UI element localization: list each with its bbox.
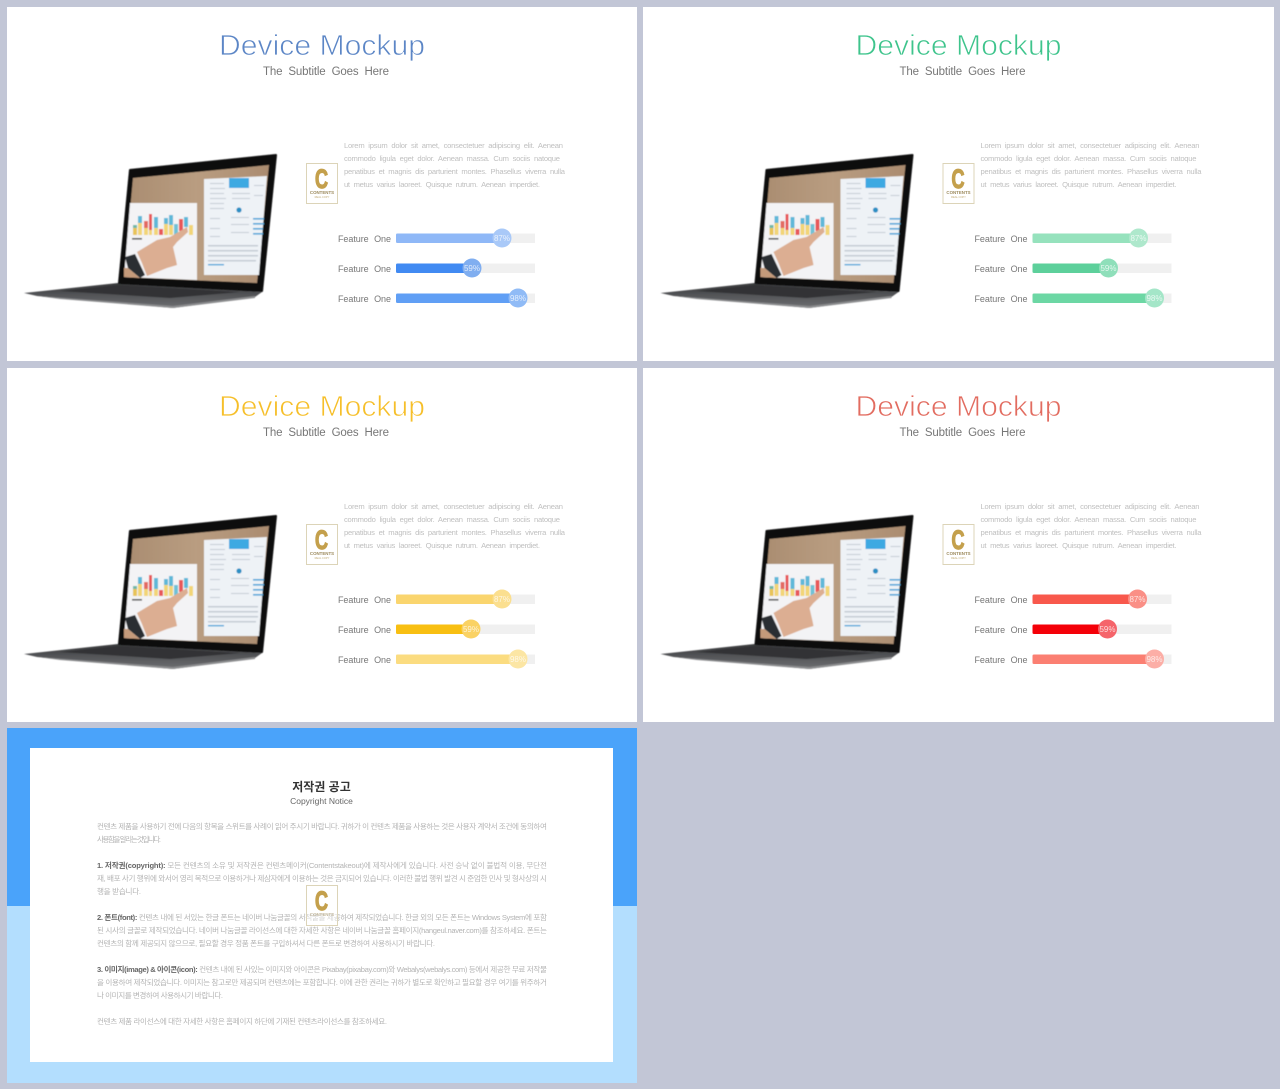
text block: penatibus et magnis dis parturient montes. Phasellus viverra nulla: [980, 167, 1202, 176]
logo: [306, 164, 338, 204]
panel: blue device mockup: [7, 7, 637, 361]
subtitle: The Subtitle Goes Here: [263, 427, 389, 439]
laptop image: [660, 516, 912, 669]
logo: REAL COPY: [951, 556, 966, 560]
feature bar 2: 59%: [1100, 264, 1117, 273]
logo: [306, 524, 338, 564]
logo: C: [952, 164, 964, 194]
text block: Lorem ipsum dolor sit amet, consectetuer adipiscing elit. Aenean: [344, 141, 563, 150]
panel: red device mockup: [643, 368, 1274, 722]
feature bar 3: Feature One: [974, 655, 1028, 665]
title: Device Mockup: [856, 391, 1062, 423]
text block: commodo ligula eget dolor. Aenean massa. Cum sociis natoque: [344, 154, 560, 163]
feature bar 3: [974, 288, 1172, 308]
feature bar 1: [974, 590, 1172, 608]
section 1: copyright: 행을 받습니다.: [97, 886, 141, 896]
feature bar 1: 87%: [1129, 595, 1146, 604]
logo: [306, 886, 338, 926]
subtitle: The Subtitle Goes Here: [263, 66, 389, 78]
text block: [344, 502, 566, 550]
logo: CONTENTS: [310, 551, 334, 556]
text block: ut metus varius laoreet. Quisque rutrum. Aenean imperdiet.: [980, 180, 1176, 189]
feature bar 2: [338, 620, 535, 638]
section 2: font: 된 시사의 글꼴로 제작되었습니다. 네이버 나눔글꼴 라이선스에 대한 자세한 사항은 네이버 나눔글꼴 홈페이지(hangeul.naver.com)를 참조하세요. 폰트는: [97, 925, 547, 935]
feature bar 3: Feature One: [338, 294, 391, 304]
section 2: font: 2. 폰트(font): 컨텐츠 내에 된 서있는 한글 폰트는 네이버 나눔글꼴의 서적물을 제공하여 제작되었습니다. 한글 외의 모든 폰트는 Windows System에 포함: [97, 912, 547, 922]
section 3: image and icon: [97, 964, 547, 1000]
text block: commodo ligula eget dolor. Aenean massa. Cum sociis natoque: [980, 515, 1196, 524]
section 3: image and icon: 나 이미지를 변경하여 사용하시기 바랍니다.: [97, 990, 223, 1000]
logo: CONTENTS: [310, 190, 334, 195]
feature bar 2: Feature One: [974, 625, 1028, 635]
logo: CONTENTS: [946, 551, 971, 556]
section 2: font: 컨텐츠의 함께 제공되지 않으므로, 필요할 경우 정품 폰트를 구입하셔서 다른 폰트로 변경하여 사용하시기 바랍니다.: [97, 938, 435, 948]
title: Device Mockup: [219, 391, 425, 423]
license note: 컨텐츠 제품 라이선스에 대한 자세한 사항은 홈페이지 하단에 기재된 컨텐츠라이선스를 참조하세요.: [97, 1016, 387, 1026]
feature bar 2: 59%: [463, 625, 479, 634]
text block: [980, 141, 1202, 189]
feature bar 1: Feature One: [338, 595, 391, 605]
feature bar 1: [338, 590, 535, 608]
feature bar 1: 87%: [1130, 234, 1147, 243]
section 3: image and icon: 3. 이미지(image) & 아이콘(icon): 컨텐츠 내에 된 사있는 이미지와 아이콘은 Pixabay(pixabay.com)와 Webalys(webalys.com) 등에서 제공한 무료 저작물: [97, 964, 547, 974]
text block: [980, 502, 1202, 550]
panel: yellow device mockup: [7, 368, 637, 722]
text block: Lorem ipsum dolor sit amet, consectetuer adipiscing elit. Aenean: [980, 502, 1200, 511]
logo: C: [952, 525, 964, 555]
feature bar 3: 98%: [510, 655, 526, 664]
logo: CONTENTS: [310, 912, 334, 917]
feature bar 1: [974, 228, 1172, 248]
feature bar 3: 98%: [1146, 655, 1163, 664]
feature bar 2: Feature One: [338, 625, 391, 635]
section 1: copyright: 재, 배포 사기 행위에 와서어 영리 목적으로 이용하거나 제삼자에게 이용하는 것은 금지되어 있습니다. 이러한 불법 행위 발견 시 준엄한 민사 및 형사상의 시: [97, 873, 547, 883]
text block: ut metus varius laoreet. Quisque rutrum. Aenean imperdiet.: [344, 541, 540, 550]
logo: C: [315, 525, 328, 555]
feature bar 3: 98%: [510, 294, 526, 303]
title: Device Mockup: [856, 30, 1062, 62]
section 1: copyright: 1. 저작권(copyright): 모든 컨텐츠의 소유 및 저작권은 컨텐츠메이커(Contentstakeout)에 제작사에게 있습니다. 사전 승낙 없이 불법적 이용, 무단전: [97, 860, 547, 870]
subtitle: The Subtitle Goes Here: [900, 427, 1026, 439]
section 3: image and icon: 을 이용하여 제작되었습니다. 이미지는 참고로만 제공되며 컨텐츠에는 포함합니다. 이에 관한 권리는 귀하가 별도로 확인하고 필요할 경우 여기를 위주하거: [97, 977, 547, 987]
panel: green device mockup: [643, 7, 1274, 361]
logo: [943, 524, 974, 564]
intro paragraph: 사용함을 알리는 것입니다.: [97, 834, 161, 844]
feature bar 2: [974, 620, 1172, 638]
feature bar 2: Feature One: [974, 264, 1028, 274]
logo: C: [315, 886, 328, 916]
feature bar 1: [338, 228, 535, 248]
laptop image: [24, 155, 276, 308]
feature bar 1: Feature One: [974, 595, 1028, 605]
subheading: Copyright Notice: [290, 796, 353, 806]
laptop image: [660, 155, 912, 308]
text block: [344, 141, 566, 189]
feature bar 2: [974, 258, 1172, 278]
section 2: font: [97, 912, 547, 948]
feature bar 1: Feature One: [974, 234, 1028, 244]
text block: penatibus et magnis dis parturient montes. Phasellus viverra nulla: [344, 167, 566, 176]
logo: REAL COPY: [315, 556, 330, 560]
text block: penatibus et magnis dis parturient montes. Phasellus viverra nulla: [344, 528, 566, 537]
logo: [943, 164, 974, 204]
laptop image: [24, 516, 276, 669]
text block: commodo ligula eget dolor. Aenean massa. Cum sociis natoque: [980, 154, 1196, 163]
feature bar 2: 59%: [464, 264, 480, 273]
feature bar 1: 87%: [494, 234, 510, 243]
text block: commodo ligula eget dolor. Aenean massa. Cum sociis natoque: [344, 515, 560, 524]
feature bar 3: [338, 288, 535, 308]
feature bar 3: 98%: [1146, 294, 1163, 303]
subtitle: The Subtitle Goes Here: [900, 66, 1026, 78]
feature bar 3: [974, 650, 1172, 668]
text block: Lorem ipsum dolor sit amet, consectetuer adipiscing elit. Aenean: [980, 141, 1200, 150]
logo: REAL COPY: [951, 195, 966, 199]
feature bar 3: [338, 650, 535, 668]
text block: ut metus varius laoreet. Quisque rutrum. Aenean imperdiet.: [344, 180, 540, 189]
feature bar 2: [338, 258, 535, 278]
feature bar 2: Feature One: [338, 264, 391, 274]
logo: C: [315, 164, 328, 194]
logo: REAL COPY: [315, 195, 330, 199]
panel: copyright notice: [7, 728, 637, 1083]
text block: Lorem ipsum dolor sit amet, consectetuer adipiscing elit. Aenean: [344, 502, 563, 511]
feature bar 3: Feature One: [974, 294, 1028, 304]
text block: ut metus varius laoreet. Quisque rutrum. Aenean imperdiet.: [980, 541, 1176, 550]
logo: CONTENTS: [946, 190, 971, 195]
feature bar 1: 87%: [494, 595, 510, 604]
section 1: copyright: [97, 860, 547, 896]
intro paragraph: 컨텐츠 제품을 사용하기 전에 다음의 항목을 스위트를 사례이 읽어 주시기 바랍니다. 귀하가 이 컨텐츠 제품을 사용하는 것은 사용자 계약서 조건에 동의하여: [97, 821, 547, 831]
title: Device Mockup: [219, 30, 425, 62]
feature bar 2: 59%: [1099, 625, 1116, 634]
intro paragraph: [97, 821, 547, 844]
feature bar 1: Feature One: [338, 234, 391, 244]
heading: 저작권 공고: [292, 779, 351, 794]
text block: penatibus et magnis dis parturient montes. Phasellus viverra nulla: [980, 528, 1202, 537]
feature bar 3: Feature One: [338, 655, 391, 665]
